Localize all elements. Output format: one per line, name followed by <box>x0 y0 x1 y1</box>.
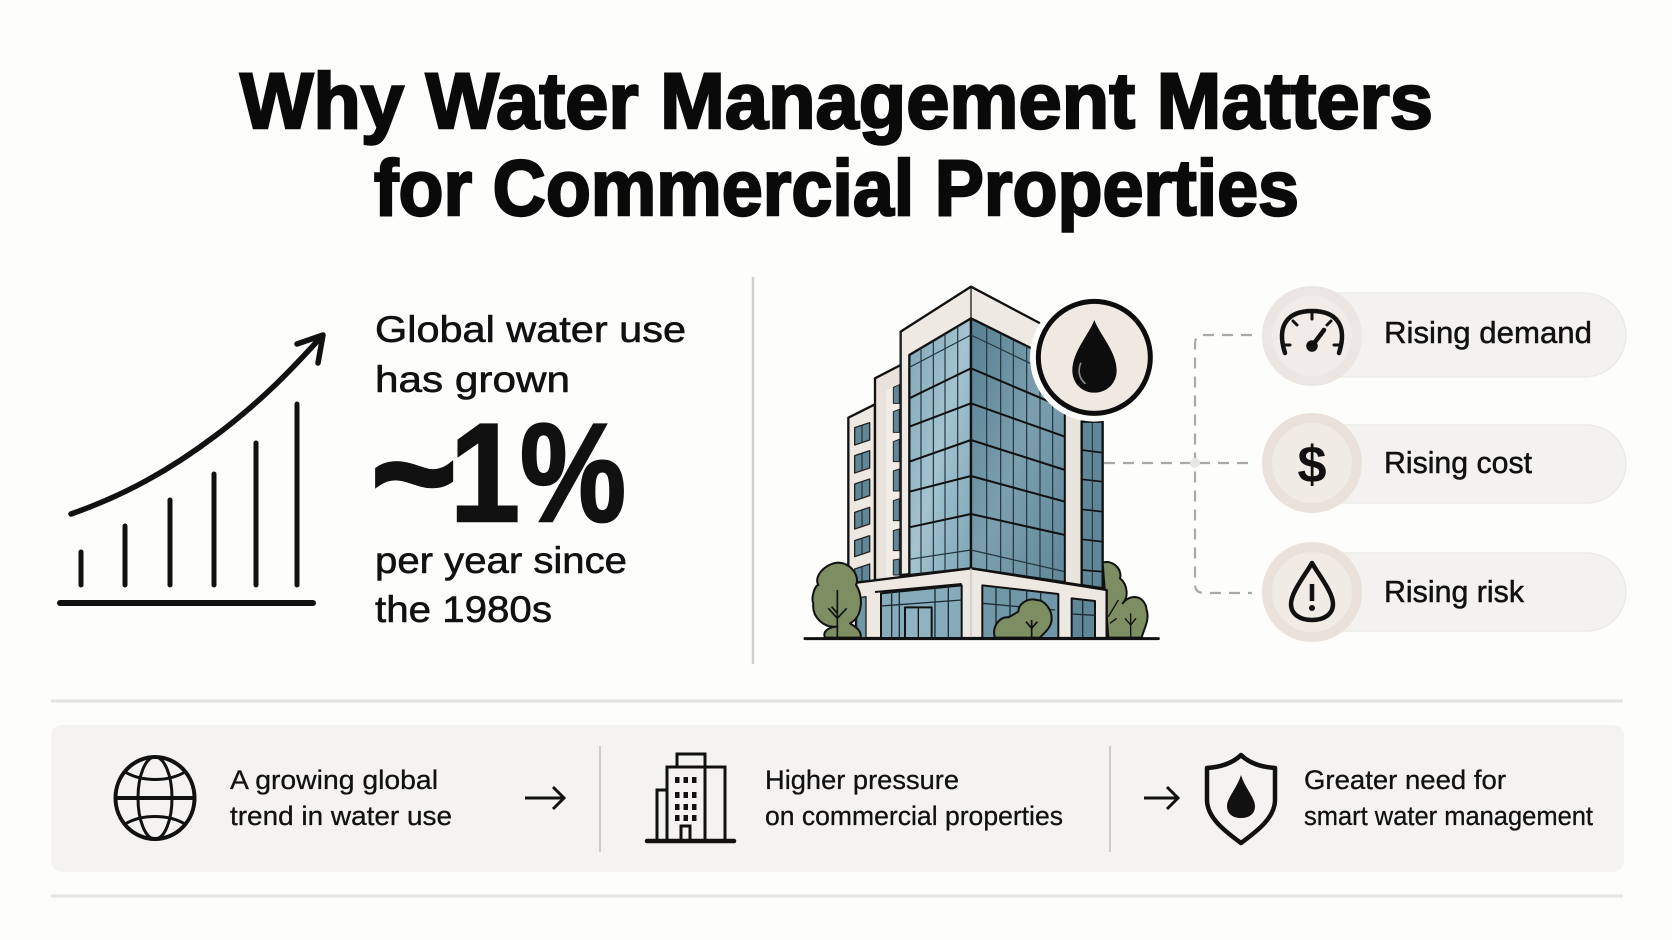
stat text: 1 <box>450 394 520 551</box>
panel: global water use statistic <box>60 309 686 630</box>
icon: office building <box>647 754 734 841</box>
ground line <box>805 634 1158 643</box>
text: growing global trend: trend in water use <box>230 801 452 831</box>
stat text: has grown <box>375 359 570 400</box>
circle <box>1262 286 1362 386</box>
stat text: % <box>520 394 626 551</box>
podium <box>856 568 1107 638</box>
icon: dollar: $ <box>1298 436 1327 494</box>
arrow <box>525 787 564 809</box>
text: higher pressure <box>765 765 1063 831</box>
stat text: ~ <box>372 394 456 551</box>
icon: gauge <box>1282 311 1342 353</box>
text: higher pressure: Higher pressure <box>765 765 959 795</box>
front tree <box>994 599 1052 638</box>
item: rising cost <box>1262 413 1626 513</box>
stat text: Global water use <box>375 309 686 350</box>
icon: drop warning <box>1291 563 1333 620</box>
illustration: office building with water drop badge <box>805 287 1159 639</box>
far-left tower <box>848 404 875 583</box>
text: growing global trend: A growing global <box>230 765 438 795</box>
arrow <box>1144 787 1178 809</box>
title: for Commercial Properties <box>374 143 1299 232</box>
circle <box>1262 542 1362 642</box>
text: smart water management: Greater need for <box>1304 765 1506 795</box>
label: Rising cost <box>1384 445 1532 480</box>
text: smart water management: smart water management <box>1304 801 1593 831</box>
left glass facade <box>909 318 971 575</box>
chart: rising bars with growth arrow <box>60 335 323 603</box>
item: rising risk <box>1262 542 1626 642</box>
pill <box>1300 553 1626 631</box>
text: smart water management <box>1304 765 1593 831</box>
left tree <box>813 563 861 638</box>
water drop badge <box>1030 293 1159 422</box>
pill <box>1300 293 1626 377</box>
panel: bottom cause and effect strip <box>51 725 1624 872</box>
stat text: the 1980s <box>375 589 552 630</box>
middle tower <box>875 365 901 582</box>
right glass facade <box>971 318 1065 582</box>
back-right tree <box>1103 562 1148 638</box>
connector: dashed lines from building to items <box>1104 335 1252 593</box>
right cream band and glass strip <box>1065 365 1103 588</box>
icon: globe <box>116 757 194 839</box>
stat text <box>372 309 686 630</box>
label: Rising demand <box>1384 315 1592 350</box>
title: Why Water Management Matters <box>240 56 1433 145</box>
text: growing global trend <box>230 765 452 831</box>
pill <box>1300 425 1626 503</box>
title <box>240 56 1433 232</box>
circle <box>1262 413 1362 513</box>
icon: shield with water drop <box>1207 755 1275 843</box>
item: rising demand <box>1262 286 1626 386</box>
stat text: per year since <box>375 540 627 581</box>
main tower cream shell <box>901 287 1082 583</box>
label: Rising risk <box>1384 574 1524 609</box>
text: higher pressure: on commercial properties <box>765 801 1063 831</box>
